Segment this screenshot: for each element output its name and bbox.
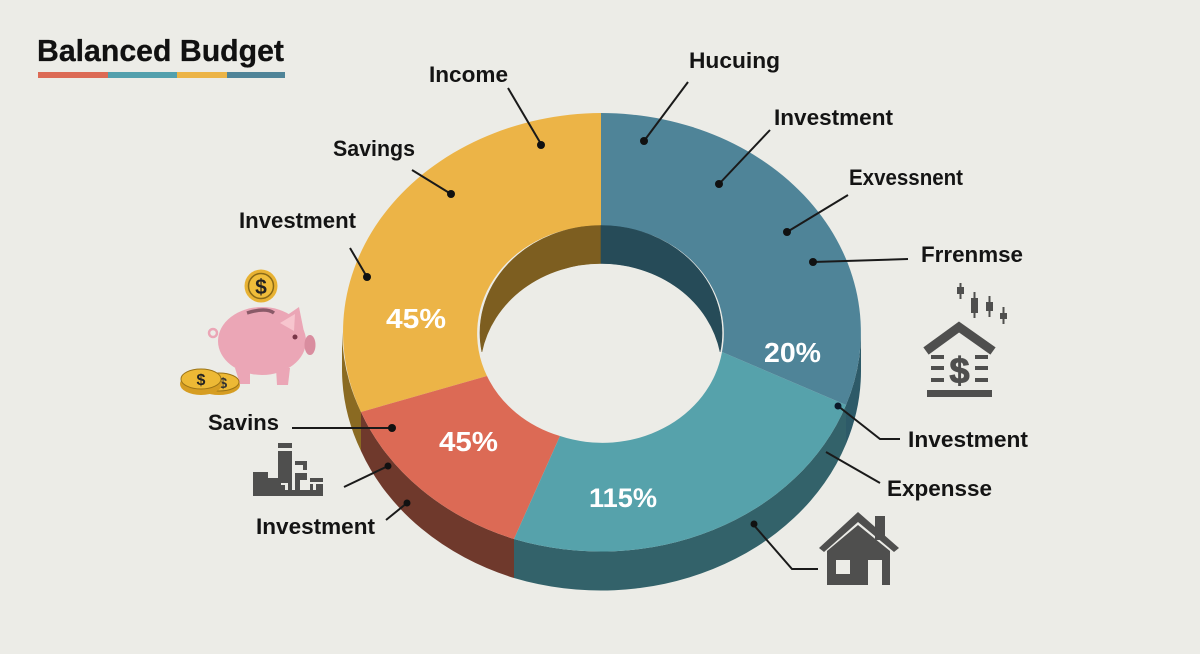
inner wall: right — [601, 226, 722, 352]
icon: falling coin: $ — [255, 276, 267, 299]
side wall: blue — [846, 332, 861, 444]
leader lines and labels — [208, 48, 1029, 569]
icon: ledger lines — [931, 355, 988, 382]
label: Expensse: Expensse — [887, 476, 992, 501]
inner wall: left — [480, 226, 601, 352]
icon: candlesticks — [957, 283, 1007, 324]
label: Savins: Savins — [208, 410, 279, 435]
leader: house — [750, 520, 818, 569]
value labels — [386, 303, 821, 513]
value labels: 45% — [439, 426, 498, 457]
segment: red — [361, 376, 560, 539]
icon: pig — [209, 307, 316, 385]
icon: dollar sign: $ — [949, 350, 970, 391]
label: Frrenmse — [809, 242, 1023, 267]
label: Investment lower left — [256, 462, 410, 539]
label: Investment upper left — [239, 208, 371, 281]
icon: piggy bank with coins — [180, 270, 316, 395]
label: Savings: Savings — [333, 136, 415, 161]
icon: coin stack: $ — [219, 375, 228, 392]
icon: roof — [926, 327, 993, 351]
side wall: teal — [514, 405, 846, 591]
label: Investment lower right — [834, 402, 1029, 452]
segment: teal — [514, 352, 846, 552]
value labels: 45% — [386, 303, 446, 334]
value labels: 20% — [764, 337, 821, 368]
label: Hucuing — [640, 48, 780, 145]
label: Investment lower left: Investment — [256, 514, 376, 539]
donut chart — [342, 113, 861, 591]
label: Exvessnent — [783, 165, 964, 236]
title: Balanced Budget — [37, 33, 284, 68]
icon: house — [819, 512, 899, 585]
icon: bar blocks — [253, 443, 323, 496]
label: Frrenmse: Frrenmse — [921, 242, 1023, 267]
icon: coin stack: $ — [197, 372, 206, 389]
side wall: yellow — [342, 332, 361, 451]
label: Investment top right — [715, 105, 894, 188]
value labels: 115% — [589, 483, 657, 513]
label: Investment lower right: Investment — [908, 427, 1029, 452]
icon: house with dollar and candlesticks — [926, 283, 1007, 397]
icon: base — [927, 390, 992, 397]
segment: blue — [601, 113, 861, 405]
segment: yellow — [343, 113, 601, 412]
label: Income — [429, 62, 545, 149]
label: Investment top right: Investment — [774, 105, 894, 130]
icon: coin stack — [180, 369, 240, 395]
label: Investment upper left: Investment — [239, 208, 357, 233]
label: Exvessnent: Exvessnent — [849, 165, 964, 190]
label: Savings — [333, 136, 455, 198]
label: Hucuing: Hucuing — [689, 48, 780, 73]
label: Savins — [208, 410, 396, 435]
label: Income: Income — [429, 62, 508, 87]
label: Expensse — [826, 452, 992, 501]
side wall: red — [361, 412, 514, 578]
